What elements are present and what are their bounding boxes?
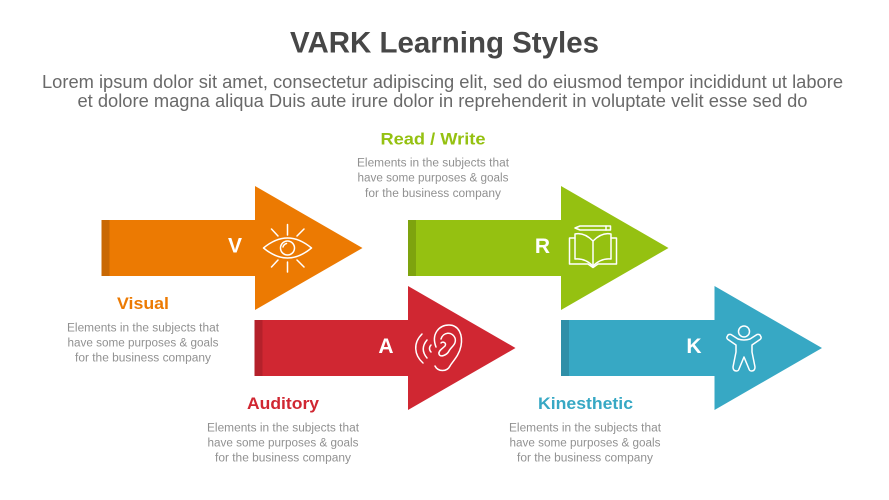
- caption: read / write: [357, 130, 510, 200]
- letter K: K: [686, 335, 702, 358]
- description: read / write: [357, 158, 510, 200]
- icon: eye: [264, 224, 312, 272]
- description: read / write: for the business company: [365, 188, 501, 200]
- arrow: auditory: [254, 286, 516, 410]
- heading: Kinesthetic: Kinesthetic: [538, 394, 633, 413]
- letter A: A: [378, 335, 394, 358]
- description: auditory: Elements in the subjects that: [207, 422, 360, 434]
- description: visual: Elements in the subjects that: [67, 322, 220, 334]
- description: visual: [67, 322, 220, 364]
- description: auditory: [207, 422, 360, 464]
- arrow: visual: [102, 186, 362, 310]
- letter R: R: [535, 235, 550, 258]
- arrow: kinesthetic: [561, 286, 822, 410]
- subtitle text block: Lorem ipsum dolor sit amet, consectetur adipiscing elit, sed do eiusmod tempor incididunt ut labore: [42, 72, 843, 92]
- description: visual: have some purposes & goals: [68, 338, 219, 350]
- description: kinesthetic: have some purposes & goals: [510, 438, 661, 450]
- caption: kinesthetic: [509, 394, 662, 464]
- arrow: read / write: [408, 186, 668, 310]
- title: VARK Learning Styles: [290, 26, 599, 60]
- icon: book and pencil: [570, 226, 616, 268]
- description: read / write: Elements in the subjects that: [357, 158, 510, 170]
- caption: auditory: [207, 394, 360, 464]
- description: visual: for the business company: [75, 352, 211, 364]
- letter V: V: [228, 234, 242, 258]
- icon: ear with sound waves: [416, 325, 462, 370]
- description: auditory: have some purposes & goals: [208, 438, 359, 450]
- heading: Read / Write: Read / Write: [380, 130, 486, 148]
- caption: visual: [67, 294, 220, 364]
- description: kinesthetic: for the business company: [517, 452, 653, 464]
- description: auditory: for the business company: [215, 452, 351, 464]
- description: kinesthetic: Elements in the subjects that: [509, 422, 662, 434]
- heading: Visual: Visual: [117, 294, 169, 313]
- subtitle text block: [42, 72, 843, 111]
- description: kinesthetic: [509, 422, 662, 464]
- subtitle text block: et dolore magna aliqua Duis aute irure dolor in reprehenderit in voluptate velit esse sed do: [78, 91, 808, 111]
- icon: person with raised arms: [727, 326, 761, 371]
- description: read / write: have some purposes & goals: [358, 172, 509, 184]
- heading: Auditory: Auditory: [247, 394, 320, 413]
